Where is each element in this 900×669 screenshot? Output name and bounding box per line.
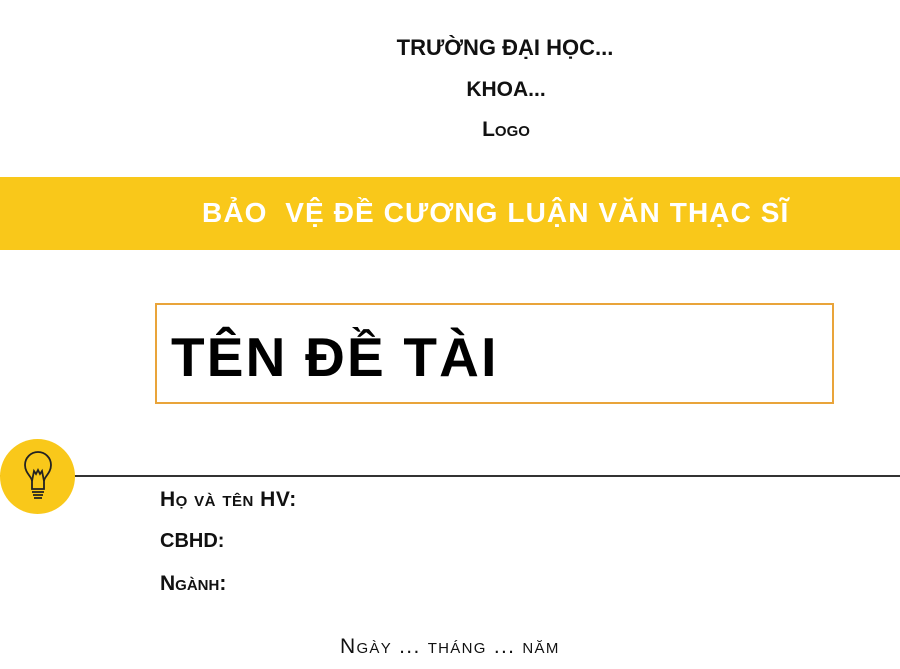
divider line [0,475,900,477]
title box [155,303,834,404]
header: faculty: KHOA... [466,78,546,101]
info: student name: Họ và tên HV: [160,488,297,511]
icon: light bulb [0,439,75,514]
info: major: Ngành: [160,572,226,595]
banner [0,177,900,250]
info: supervisor: CBHD: [160,530,224,552]
banner title: BẢO VỆ ĐỀ CƯƠNG LUẬN VĂN THẠC SĨ [202,197,789,228]
date: Ngày ... tháng ... năm [340,635,560,658]
header: university: TRƯỜNG ĐẠI HỌC... [397,35,613,60]
header: logo: Logo [482,118,530,141]
title text: TÊN ĐỀ TÀI [171,326,499,388]
